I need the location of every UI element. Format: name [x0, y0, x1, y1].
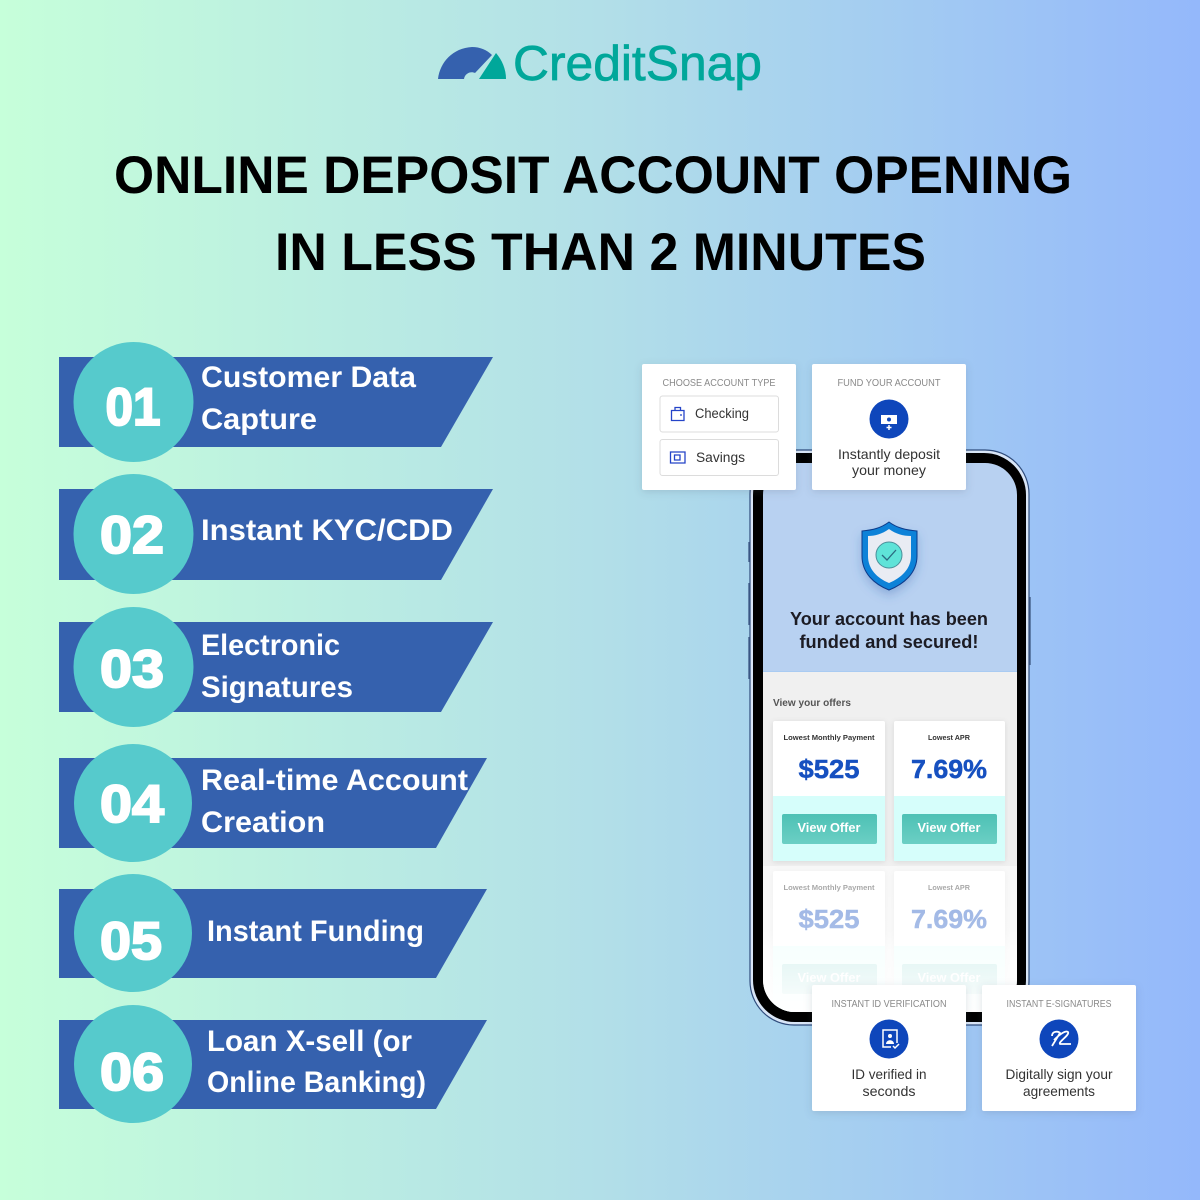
- card: fund your account: Instantly deposit: [838, 446, 940, 462]
- faded offer cards: View Offer: [918, 971, 981, 985]
- faded offer cards: [763, 866, 1017, 1016]
- phone mockup: [749, 450, 1030, 1025]
- card: fund your account: [812, 364, 966, 490]
- title: IN LESS THAN 2 MINUTES: [275, 223, 926, 282]
- faded offer cards: Lowest APR: [928, 885, 970, 892]
- card: instant e-signatures: Digitally sign your: [1006, 1066, 1113, 1082]
- title: ONLINE DEPOSIT ACCOUNT OPENING: [114, 146, 1072, 205]
- offers label: View your offers: [773, 698, 851, 709]
- offer card: monthly payment: [773, 721, 885, 861]
- title: [114, 146, 1072, 282]
- step 04: [59, 744, 487, 862]
- icon: signature: [1040, 1020, 1078, 1058]
- card: instant e-signatures: INSTANT E-SIGNATURES: [1006, 998, 1112, 1010]
- step 05: Instant Funding: [207, 915, 424, 948]
- card: instant ID verification: INSTANT ID VERIFICATION: [832, 998, 946, 1010]
- step 06: [59, 1005, 487, 1123]
- card: instant e-signatures: [982, 985, 1136, 1111]
- card: instant ID verification: ID verified in: [852, 1066, 926, 1082]
- step 05: 05: [100, 912, 162, 971]
- step 01: Capture: [201, 403, 317, 436]
- option: savings: Savings: [696, 450, 745, 465]
- funded message: [790, 612, 987, 648]
- logo wordmark: CreditSnap: [513, 37, 762, 91]
- faded offer cards: View Offer: [798, 971, 861, 985]
- step 02: [59, 474, 493, 594]
- icon: ID badge: [870, 1020, 908, 1058]
- step 03: [59, 607, 493, 727]
- step 01: Customer Data: [201, 361, 416, 394]
- faded offer cards: Lowest Monthly Payment: [784, 885, 875, 892]
- card: instant ID verification: [812, 985, 966, 1111]
- step 01: [59, 342, 493, 462]
- funded message: funded and secured!: [800, 631, 978, 652]
- funded message: Your account has been: [790, 608, 988, 629]
- offer card: APR: 7.69%: [911, 754, 987, 784]
- card: fund your account: your money: [852, 462, 926, 478]
- step 03: Signatures: [201, 671, 353, 704]
- offer card: APR: Lowest APR: [928, 735, 970, 742]
- option: checking: [660, 396, 778, 432]
- card: choose account type: CHOOSE ACCOUNT TYPE: [662, 377, 776, 389]
- step 04: Creation: [201, 806, 325, 839]
- offer card: monthly payment: Lowest Monthly Payment: [784, 735, 875, 742]
- card: instant ID verification: seconds: [862, 1083, 916, 1099]
- step 03: Electronic: [201, 629, 340, 662]
- card: fund your account: FUND YOUR ACCOUNT: [838, 377, 941, 389]
- offer card: monthly payment: View Offer: [798, 821, 861, 835]
- option: checking: Checking: [695, 406, 749, 421]
- logo: CreditSnap: [438, 37, 762, 91]
- step 04: 04: [100, 775, 165, 834]
- step 06: Loan X-sell (or: [207, 1025, 412, 1058]
- step 05: [59, 874, 487, 992]
- offer card: monthly payment: $525: [798, 754, 860, 784]
- option: savings: [660, 440, 778, 476]
- step 01: 01: [106, 378, 160, 437]
- step 02: 02: [100, 506, 164, 565]
- icon: shield: [862, 522, 917, 590]
- step 06: 06: [100, 1043, 164, 1102]
- offer card: APR: View Offer: [918, 821, 981, 835]
- icon: gauge: [438, 47, 506, 79]
- icon: deposit: [870, 400, 908, 438]
- faded offer cards: 7.69%: [911, 904, 987, 934]
- offer card: APR: [894, 721, 1005, 861]
- card: choose account type: [642, 364, 796, 490]
- faded offer cards: $525: [798, 904, 860, 934]
- step 03: 03: [100, 640, 164, 699]
- step 02: Instant KYC/CDD: [201, 514, 453, 547]
- step 04: Real-time Account: [201, 764, 468, 797]
- step 06: Online Banking): [207, 1066, 426, 1099]
- card: instant e-signatures: agreements: [1023, 1083, 1095, 1099]
